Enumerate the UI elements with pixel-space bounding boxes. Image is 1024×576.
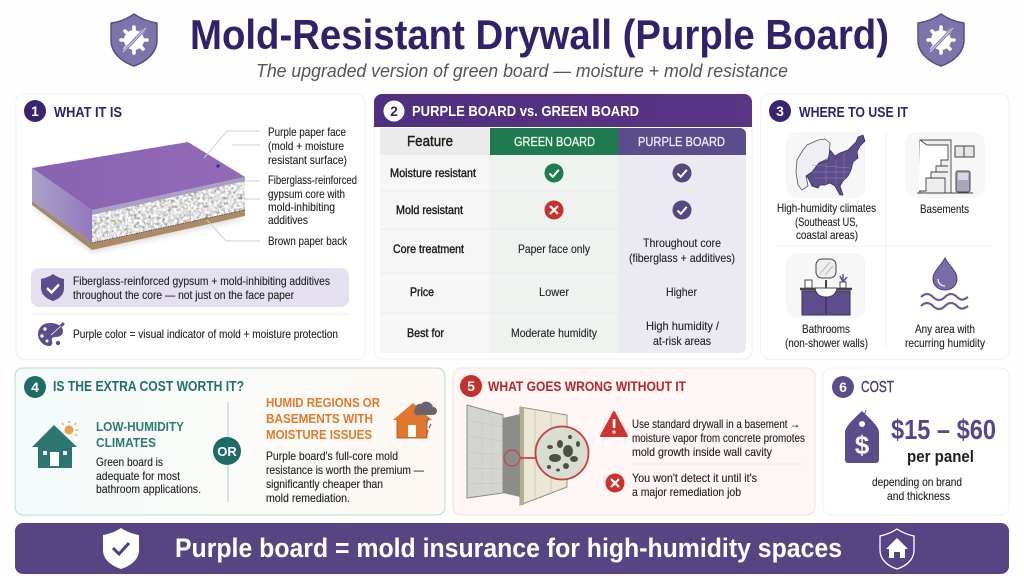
heading: where to use it — [769, 100, 908, 122]
row: best for: Moderate humidity — [511, 326, 597, 340]
panel: where to use it — [761, 94, 1009, 359]
labels: board layers: Fiberglass-reinforced — [268, 173, 357, 187]
panel: purple board vs green board — [374, 94, 752, 359]
warning: detection — [606, 471, 757, 499]
row: core treatment: Paper face only — [518, 242, 590, 256]
subtitle: The upgraded version of green board — moisture + mold resistance — [256, 61, 788, 81]
badge: or — [213, 437, 241, 465]
labels: board layers: additives — [268, 213, 308, 227]
labels: board layers: Purple paper face — [268, 125, 346, 139]
item: recurring humidity — [905, 258, 985, 350]
warning: use standard drywall: mold growth inside wall cavity — [632, 445, 772, 459]
price — [891, 414, 996, 466]
labels: board layers: mold-inhibiting — [268, 200, 335, 214]
item: high-humidity climates: High-humidity climates — [777, 201, 876, 215]
text: humid regions: mold remediation. — [266, 491, 350, 505]
row: moisture resistant: Moisture resistant — [390, 166, 477, 180]
text: humid regions: Purple board's full-core mold — [266, 449, 398, 463]
heading: cost: 6 — [839, 379, 847, 395]
row: core treatment — [393, 236, 735, 265]
row: best for: at-risk areas — [653, 334, 711, 348]
heading: what it is: 1 — [31, 103, 39, 119]
text: humid regions — [266, 395, 424, 505]
leader lines — [204, 131, 260, 241]
row: best for — [407, 319, 720, 348]
row: price — [410, 285, 697, 299]
item: bathrooms: Bathrooms — [802, 322, 850, 336]
heading: what it is: WHAT IT IS — [54, 104, 122, 121]
icon: shield with house — [880, 529, 914, 569]
row: best for: High humidity / — [646, 319, 720, 333]
title: Mold-Resistant Drywall (Purple Board) — [190, 11, 889, 58]
text: humid regions: HUMID REGIONS OR — [266, 395, 381, 410]
panel: is the extra cost worth it — [15, 368, 445, 515]
labels: board layers: Brown paper back — [268, 234, 348, 248]
heading: what goes wrong: WHAT GOES WRONG WITHOUT IT — [488, 378, 686, 394]
warning: detection: You won't detect it until it's — [632, 471, 757, 485]
callout: fiberglass core: throughout the core — not just on the face paper — [73, 288, 294, 302]
warning: detection: a major remediation job — [632, 485, 741, 499]
heading: extra cost: IS THE EXTRA COST WORTH IT? — [53, 379, 244, 395]
row: price: Price — [410, 285, 434, 299]
panel: what goes wrong — [453, 368, 815, 515]
row: price: Higher — [666, 285, 697, 299]
row: mold resistant: Mold resistant — [396, 203, 464, 217]
text: low-humidity climates: adequate for most — [96, 469, 181, 483]
labels: board layers: gypsum core with — [268, 187, 345, 201]
icon: price tag — [845, 410, 879, 463]
heading: what goes wrong: 5 — [467, 378, 475, 394]
item: basements: Basements — [920, 202, 969, 216]
item: recurring humidity: Any area with — [915, 322, 975, 336]
badge: or: OR — [217, 444, 237, 459]
labels: board layers: resistant surface) — [268, 153, 347, 167]
warning: use standard drywall: Use standard drywall in a basement → — [632, 417, 800, 431]
item: high-humidity climates: (Southeast US, — [795, 215, 858, 229]
panel: what it is — [16, 94, 365, 359]
item: bathrooms — [785, 253, 868, 350]
icon: price tag: $ — [855, 430, 870, 460]
callout: fiberglass core — [31, 268, 349, 307]
text: humid regions: resistance is worth the premium — — [266, 463, 424, 477]
item: bathrooms: (non-shower walls) — [785, 336, 868, 350]
heading: where to use it: 3 — [776, 103, 784, 119]
heading: where to use it: WHERE TO USE IT — [799, 104, 908, 121]
note: purple color indicator — [38, 323, 338, 346]
heading: cost: COST — [861, 379, 894, 396]
item: high-humidity climates: coastal areas) — [796, 228, 858, 242]
text: humid regions: BASEMENTS WITH — [266, 411, 373, 426]
heading: what goes wrong — [460, 375, 686, 397]
warning: use standard drywall: moisture vapor from concrete promotes — [632, 431, 805, 445]
illustration: wall cavity with mold — [467, 405, 588, 505]
table header text: Feature — [407, 134, 453, 150]
labels: board layers: (mold + moisture — [268, 139, 344, 153]
illustration: board cross-section — [32, 142, 247, 253]
header: comparison: PURPLE BOARD vs. GREEN BOARD — [412, 103, 639, 120]
note: purple color indicator: Purple color = visual indicator of mold + moisture protection — [73, 327, 338, 341]
icon: white shield check — [103, 528, 139, 569]
note: depends on brand: and thickness — [887, 489, 950, 503]
note: depends on brand: depending on brand — [872, 475, 962, 489]
text: humid regions: MOISTURE ISSUES — [266, 427, 372, 442]
header: comparison — [374, 94, 752, 127]
heading: extra cost: 4 — [31, 379, 39, 395]
row: best for: Best for — [407, 326, 444, 340]
item: high-humidity climates — [777, 132, 876, 242]
row: core treatment: (fiberglass + additives) — [629, 251, 735, 265]
text: low-humidity climates — [96, 419, 201, 496]
item: basements — [905, 132, 985, 216]
heading: what it is — [24, 100, 122, 122]
banner: takeaway — [15, 523, 1009, 574]
warning: use standard drywall — [601, 412, 805, 459]
price: $15 – $60 — [891, 414, 996, 445]
table header text: GREEN BOARD — [514, 134, 595, 149]
text: low-humidity climates: LOW-HUMIDITY — [96, 419, 184, 434]
text: low-humidity climates: bathroom applications. — [96, 482, 201, 496]
panel: cost — [823, 368, 1009, 515]
table header text: PURPLE BOARD — [638, 134, 725, 149]
icon: shield right — [918, 14, 964, 66]
row: core treatment: Throughout core — [643, 236, 721, 250]
price: per panel — [907, 447, 974, 466]
text: humid regions: significantly cheaper than — [266, 477, 383, 491]
icon: orange house with rain cloud — [393, 402, 437, 438]
icon: green house with sun — [32, 421, 78, 468]
row: price: Lower — [539, 285, 569, 299]
text: low-humidity climates: Green board is — [96, 455, 163, 469]
labels: board layers — [268, 125, 357, 248]
row: core treatment: Core treatment — [393, 242, 465, 256]
text: low-humidity climates: CLIMATES — [96, 435, 156, 450]
header: comparison: 2 — [390, 103, 398, 119]
banner text: Purple board = mold insurance for high-humidity spaces — [175, 533, 842, 563]
icon: shield left — [111, 14, 157, 66]
row: mold resistant — [396, 200, 692, 220]
heading: extra cost — [24, 376, 244, 398]
table: comparison — [380, 128, 746, 353]
row: moisture resistant — [390, 164, 692, 182]
table header text — [407, 134, 725, 150]
item: recurring humidity: recurring humidity — [905, 336, 985, 350]
note: depends on brand — [872, 475, 962, 503]
callout: fiberglass core: Fiberglass-reinforced gypsum + mold-inhibiting additives — [73, 274, 330, 288]
heading: cost — [832, 376, 894, 398]
